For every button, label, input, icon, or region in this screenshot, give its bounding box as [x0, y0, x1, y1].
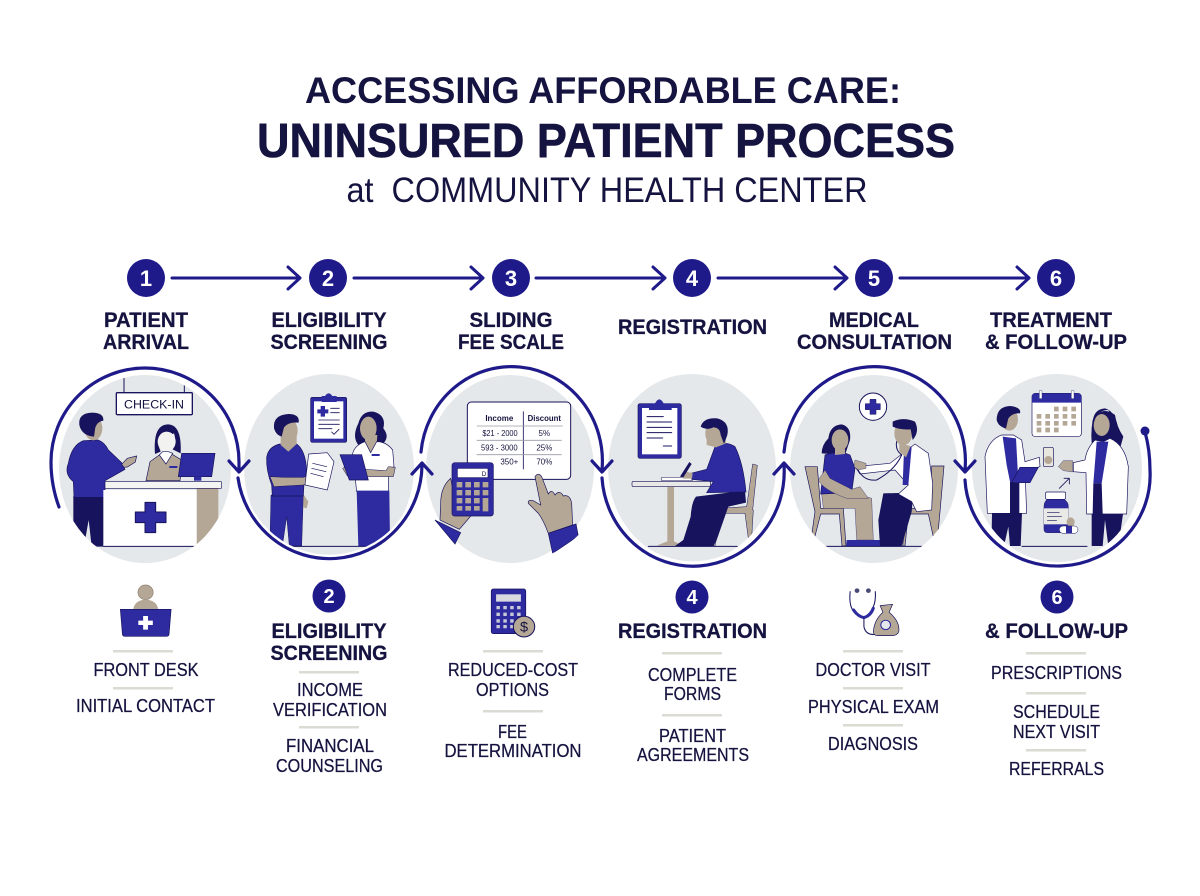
- column 2: eligibility screening: [270, 580, 388, 776]
- column 4: registration: REGISTRATION: [618, 620, 767, 643]
- arrow 4 to 5: [718, 267, 847, 289]
- connecting process rings: [51, 367, 1150, 566]
- step badge 6 lower: [1040, 580, 1074, 614]
- heading: sliding fee scale: FEE SCALE: [458, 331, 564, 354]
- heading: patient arrival: PATIENT: [104, 309, 188, 332]
- column 2: eligibility screening: SCREENING: [270, 642, 388, 665]
- ring arc 2: [238, 463, 432, 559]
- column 6: treatment and follow-up: & FOLLOW-UP: [985, 620, 1128, 643]
- heading: medical consultation: [797, 309, 952, 354]
- step badge 4 lower: [676, 580, 708, 614]
- computer monitor: [178, 453, 215, 481]
- icon: stethoscope and money bag: [850, 588, 899, 636]
- patient figure: [67, 413, 137, 547]
- income discount table: $21 - 2000: [482, 429, 518, 438]
- income discount table: 5%: [539, 429, 550, 438]
- column 4: registration: [618, 580, 767, 765]
- column 2: eligibility screening: INCOME: [297, 679, 363, 700]
- chairs: [805, 466, 944, 546]
- hand with calculator: D: [482, 471, 487, 478]
- step badge 2 lower: [312, 580, 346, 612]
- column 1: front desk: [76, 585, 215, 716]
- arrow 1 to 2: [172, 267, 300, 289]
- title: [257, 70, 955, 210]
- step headings: [103, 309, 1127, 354]
- step badge 6: [1037, 259, 1075, 297]
- chair: [711, 464, 757, 546]
- step badge 1: 1: [140, 266, 152, 291]
- step badge 3: 3: [505, 266, 517, 291]
- person writing: [675, 418, 746, 546]
- column 5: medical consultation: DOCTOR VISIT: [816, 659, 930, 680]
- step badge 1: [127, 259, 165, 297]
- column 3: sliding fee scale: OPTIONS: [476, 679, 549, 700]
- illustrations clipped to panels: [67, 378, 1128, 553]
- registration clipboard: [638, 399, 681, 458]
- income discount table: 350+: [500, 458, 519, 467]
- column 4: registration: PATIENT: [659, 725, 726, 746]
- check-in sign: [116, 378, 192, 415]
- column 6: treatment and follow-up: [985, 580, 1128, 779]
- receptionist figure: [146, 424, 183, 481]
- medicine bottle and pills: [1044, 478, 1078, 533]
- column 3: sliding fee scale: DETERMINATION: [444, 740, 582, 761]
- column 1: front desk: INITIAL CONTACT: [76, 695, 215, 716]
- income discount table: [467, 402, 571, 479]
- step badge 4: [673, 259, 711, 297]
- ring arc 6: [965, 432, 1150, 566]
- title: at COMMUNITY HEALTH CENTER: [346, 171, 868, 210]
- heading: treatment and follow-up: TREATMENT: [990, 309, 1112, 332]
- income discount table: 25%: [536, 443, 552, 452]
- heading: medical consultation: MEDICAL: [829, 309, 919, 332]
- check-in sign: CHECK-IN: [124, 398, 184, 412]
- heading: treatment and follow-up: & FOLLOW-UP: [985, 331, 1127, 354]
- arrow 5 to 6: [900, 267, 1029, 289]
- heading: medical consultation: CONSULTATION: [797, 331, 952, 354]
- income discount table: Discount: [528, 414, 561, 423]
- column 3: sliding fee scale: FEE: [498, 721, 527, 742]
- column 2: eligibility screening: COUNSELING: [276, 755, 383, 776]
- step badge 5: 5: [868, 266, 880, 291]
- column 6: treatment and follow-up: SCHEDULE: [1013, 701, 1100, 722]
- clipboard with cross: [311, 393, 347, 442]
- doctor gesturing: [1058, 408, 1128, 546]
- step timeline: [127, 259, 1075, 297]
- income discount table: Income: [485, 414, 514, 423]
- panel 1 background: [59, 375, 231, 563]
- staff figure with document: [267, 414, 334, 546]
- panel 4 background: [608, 374, 776, 562]
- arrow 3 to 4: [536, 267, 665, 289]
- column 2: eligibility screening: ELIGIBILITY: [272, 620, 386, 643]
- column 2: eligibility screening: VERIFICATION: [273, 699, 387, 720]
- heading: eligibility screening: SCREENING: [270, 331, 388, 354]
- panel 3 background: [426, 375, 594, 563]
- pointing hand: [528, 474, 578, 553]
- column 5: medical consultation: DIAGNOSIS: [828, 733, 918, 754]
- column 6: treatment and follow-up: NEXT VISIT: [1013, 721, 1100, 742]
- icon: calculator with dollar: [491, 589, 535, 637]
- column 5: medical consultation: PHYSICAL EXAM: [808, 696, 939, 717]
- heading: registration: REGISTRATION: [618, 316, 767, 339]
- registration table: [632, 477, 711, 546]
- heading: sliding fee scale: SLIDING: [470, 309, 552, 332]
- hand with calculator: [435, 463, 493, 544]
- ring halo: [51, 367, 1150, 566]
- column 1: front desk: FRONT DESK: [94, 659, 199, 680]
- column 4: registration: COMPLETE: [648, 664, 737, 685]
- illustration: medical consultation and treatment: [805, 391, 1128, 546]
- step badge 5: [855, 259, 893, 297]
- ring arc 3: [421, 367, 612, 472]
- calendar: [1032, 391, 1081, 437]
- heading: patient arrival: [103, 309, 189, 354]
- doctor with medicine bottle: [985, 406, 1053, 546]
- heading: eligibility screening: ELIGIBILITY: [272, 309, 386, 332]
- step badge 2 lower: 2: [323, 586, 335, 608]
- icon: receptionist laptop: [120, 585, 171, 636]
- arrow 2 to 3: [354, 267, 483, 289]
- heading: treatment and follow-up: [985, 309, 1127, 354]
- title: ACCESSING AFFORDABLE CARE:: [305, 70, 901, 111]
- column 4: registration: AGREEMENTS: [637, 744, 749, 765]
- illustration panels: [59, 374, 1142, 563]
- staff figure with tablet: [340, 412, 395, 546]
- doctor with stethoscope: [854, 419, 933, 546]
- icon: calculator with dollar: $: [520, 620, 528, 636]
- ring arc 1: [51, 368, 249, 507]
- column 3: sliding fee scale: [444, 589, 582, 761]
- step badge 4 lower: 4: [686, 587, 698, 609]
- panel 5 background: [790, 375, 958, 563]
- step badge 6: 6: [1050, 266, 1062, 291]
- panel 6 background: [972, 374, 1142, 562]
- illustration: fee table and registration: [435, 399, 757, 553]
- seated patient: [818, 424, 882, 546]
- ring arc 5: [784, 367, 975, 472]
- title: UNINSURED PATIENT PROCESS: [257, 115, 955, 168]
- ring end dot: [1140, 426, 1150, 436]
- heading: sliding fee scale: [458, 309, 564, 354]
- medical cross icon: [859, 393, 887, 420]
- illustration: check-in desk and eligibility screening: [67, 378, 395, 547]
- step badge 2: [309, 259, 347, 297]
- column 4: registration: FORMS: [664, 683, 721, 704]
- step badge 6 lower: 6: [1051, 587, 1063, 609]
- column 6: treatment and follow-up: PRESCRIPTIONS: [991, 662, 1122, 683]
- column 3: sliding fee scale: REDUCED-COST: [448, 659, 578, 680]
- heading: eligibility screening: [270, 309, 388, 354]
- panel 2 background: [244, 374, 414, 562]
- step badge 3: [492, 259, 530, 297]
- column 5: medical consultation: [808, 588, 939, 754]
- column 6: treatment and follow-up: REFERRALS: [1009, 758, 1104, 779]
- reception desk: [103, 482, 222, 547]
- column 2: eligibility screening: FINANCIAL: [286, 735, 374, 756]
- ring arc 4: [602, 463, 794, 566]
- heading: patient arrival: ARRIVAL: [103, 331, 189, 354]
- income discount table: 70%: [536, 458, 552, 467]
- income discount table: 593 - 3000: [481, 443, 518, 452]
- step badge 2: 2: [322, 266, 334, 291]
- step badge 4: 4: [686, 266, 699, 291]
